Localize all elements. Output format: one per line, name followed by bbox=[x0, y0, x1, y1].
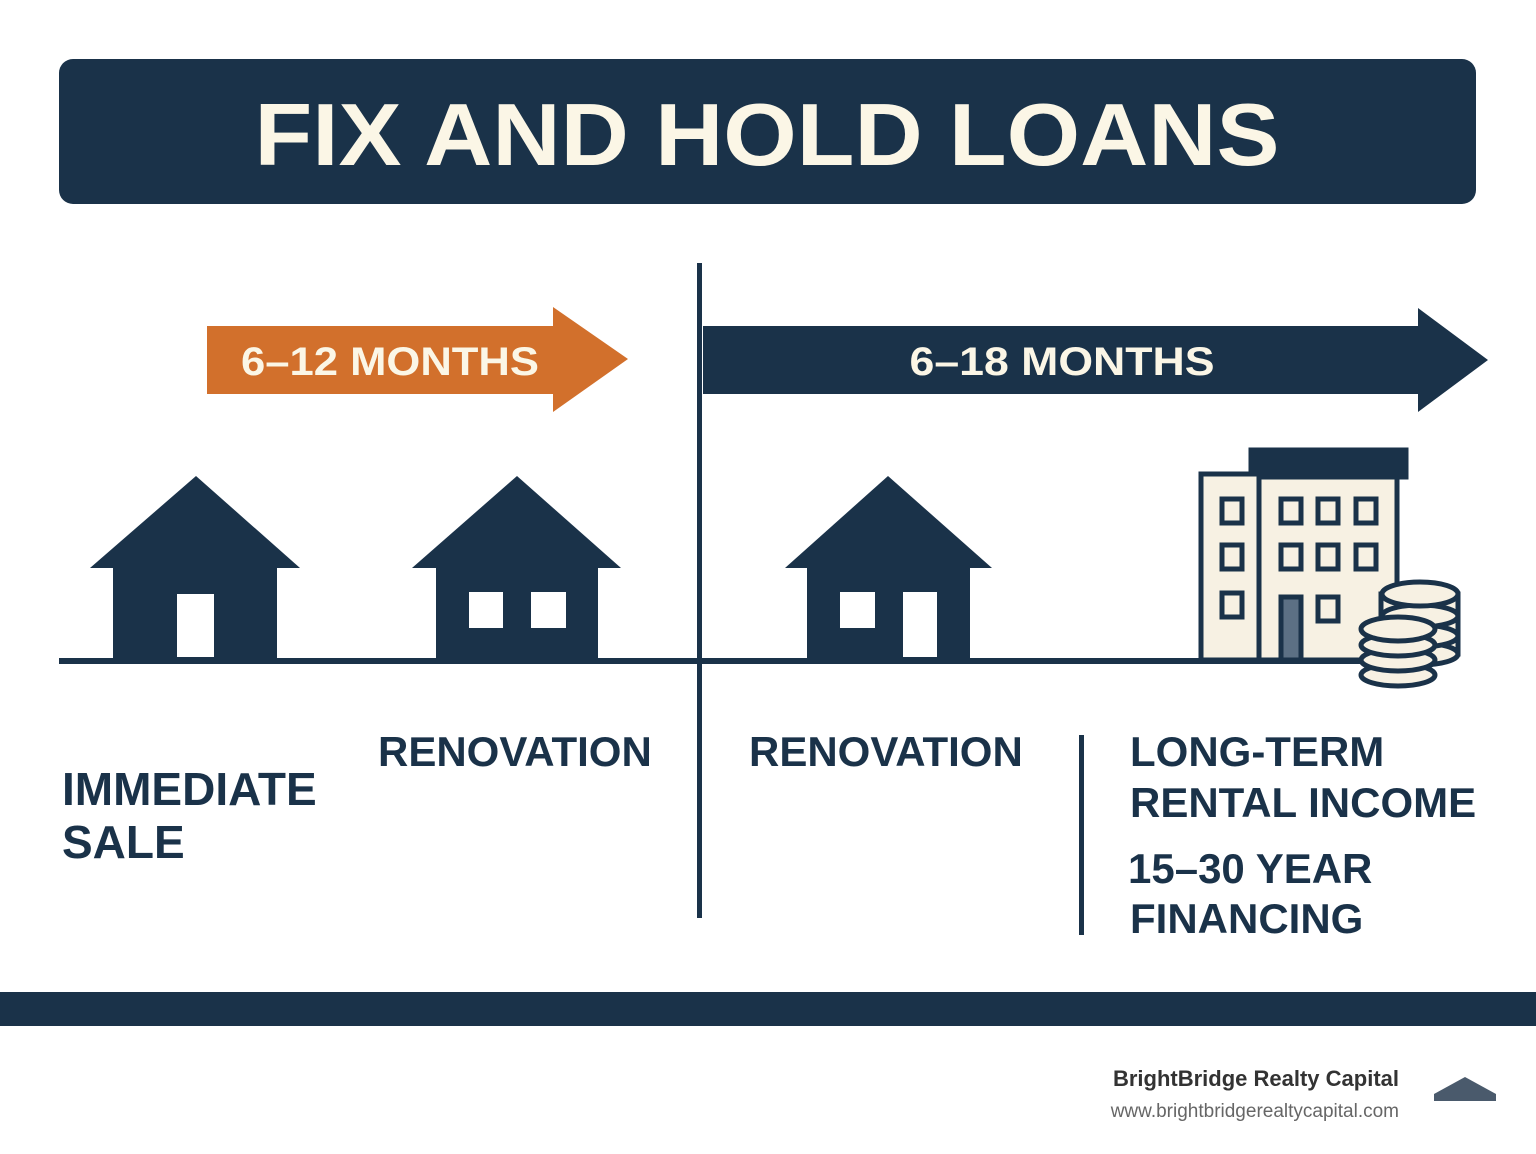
divider vertical line bbox=[697, 263, 702, 918]
small divider bbox=[1079, 735, 1084, 935]
icon: house renovation 1 bbox=[412, 476, 621, 661]
arrow: 6-18 months bbox=[703, 308, 1488, 412]
footer brand text bbox=[1110, 1066, 1399, 1122]
label: immediate sale: IMMEDIATE bbox=[62, 763, 317, 815]
arrow: 6-18 months: 6–18 MONTHS bbox=[910, 340, 1214, 384]
icon: logo bbox=[1434, 1077, 1496, 1101]
arrow: 6-12 months: 6–12 MONTHS bbox=[241, 340, 539, 384]
arrow: 6-12 months bbox=[207, 307, 628, 412]
label: long-term rental income: LONG-TERM bbox=[1130, 728, 1384, 775]
label: long-term rental income: 15–30 YEAR bbox=[1128, 845, 1372, 892]
footer brand text: BrightBridge Realty Capital bbox=[1113, 1066, 1399, 1091]
label: immediate sale: SALE bbox=[62, 816, 185, 868]
icon: house renovation 2 bbox=[785, 476, 992, 661]
label: long-term rental income: RENTAL INCOME bbox=[1130, 779, 1476, 826]
coins back stack bbox=[1381, 582, 1458, 665]
label: renovation 2: RENOVATION bbox=[749, 728, 1023, 775]
icon: apartment building with coins bbox=[1201, 450, 1458, 686]
title banner bbox=[59, 59, 1476, 204]
coins front stack bbox=[1361, 617, 1435, 686]
title banner: FIX AND HOLD LOANS bbox=[254, 85, 1280, 184]
icon: house immediate sale bbox=[90, 476, 300, 661]
footer band bbox=[0, 992, 1536, 1026]
label: renovation 1: RENOVATION bbox=[378, 728, 652, 775]
ground line bbox=[59, 658, 1364, 664]
footer brand text: www.brightbridgerealtycapital.com bbox=[1110, 1101, 1399, 1122]
label: long-term rental income: FINANCING bbox=[1130, 895, 1363, 942]
label: immediate sale bbox=[62, 763, 317, 868]
label: long-term rental income bbox=[1128, 728, 1476, 942]
